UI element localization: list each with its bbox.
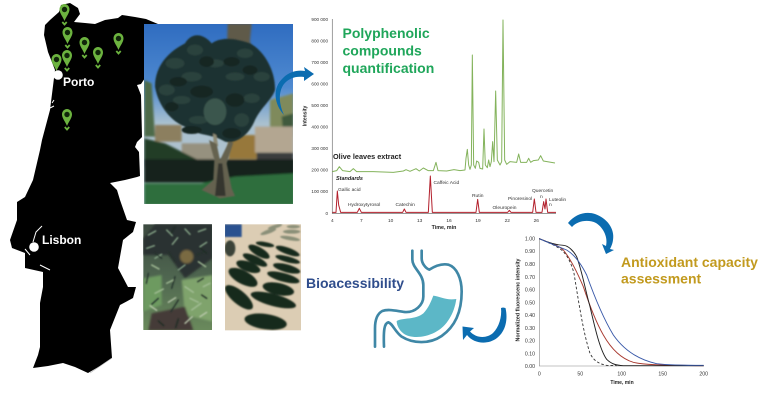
- compound labels: Hydroxytyrosol: [348, 202, 380, 208]
- x axis tick labels: 50: [577, 372, 583, 378]
- x axis tick labels: 16: [446, 218, 452, 224]
- heading: antioxidant capacity assessment: Antioxidant capacity: [621, 254, 758, 270]
- map of Portugal: [10, 3, 170, 373]
- y axis tick labels: 900 000: [311, 17, 328, 22]
- olive leaves extract trace: [332, 20, 555, 172]
- y axis tick labels: 600 000: [311, 82, 328, 86]
- y axis tick labels: 0.50: [525, 300, 535, 306]
- y axis tick labels: 100 000: [311, 189, 328, 194]
- y axis tick labels: 1.00: [525, 236, 535, 242]
- heading: polyphenolic compounds quantification: compounds: [342, 42, 422, 58]
- y axis tick labels: 300 000: [311, 146, 328, 151]
- x axis tick labels: 150: [658, 372, 667, 378]
- y axis tick labels: 0.30: [525, 326, 535, 332]
- stomach contents: [397, 296, 456, 337]
- y axis tick labels: [525, 236, 535, 370]
- Porto marker: [53, 70, 63, 80]
- x axis title: Time, min: [432, 225, 456, 231]
- compound labels: n: [549, 203, 552, 208]
- location pin: north 2: [62, 27, 72, 48]
- y axis tick labels: 400 000: [311, 124, 328, 130]
- arrow: chromatogram to antioxidant: [568, 213, 614, 254]
- photo: olive leaves on table: [221, 223, 301, 332]
- y axis tick labels: 0.90: [525, 249, 535, 255]
- x axis tick labels: 19: [475, 218, 481, 224]
- x axis title: Time, min: [610, 380, 634, 386]
- y axis tick labels: 0.10: [525, 351, 535, 357]
- compound labels: Gallic acid: [338, 187, 361, 193]
- heading: antioxidant capacity assessment: assessment: [621, 270, 702, 286]
- trace label: olive leaves extract: Olive leaves extract: [333, 152, 402, 161]
- y axis tick labels: 0.60: [525, 288, 535, 294]
- fluorescence decay chart: [516, 236, 708, 386]
- compound labels: Pinoresinol: [508, 196, 532, 202]
- location pin: north 3: [80, 37, 90, 58]
- compound labels: Quercetin: [532, 188, 553, 194]
- location pin: north 4: [93, 47, 103, 68]
- compound labels: Oleuropein: [492, 205, 517, 211]
- compound labels: n: [540, 195, 543, 200]
- y axis title: Normalized fluorescenc intensity: [516, 258, 522, 342]
- compound labels: Rutin: [472, 193, 484, 199]
- standards trace: [332, 176, 556, 212]
- stomach outline: [375, 251, 462, 347]
- arrow: tree to chromatogram: [276, 67, 314, 115]
- photo: olive branches: [143, 224, 212, 330]
- y axis tick labels: 500 000: [311, 103, 328, 108]
- decay curves: [539, 239, 704, 366]
- y axis tick labels: 200 000: [311, 168, 328, 172]
- stomach icon: [375, 251, 462, 347]
- Lisbon label: Lisbon: [42, 233, 81, 247]
- compound labels: Catechin: [396, 202, 415, 208]
- y axis tick labels: 0.70: [525, 275, 535, 281]
- x axis tick labels: 200: [699, 372, 708, 378]
- y axis tick labels: 0: [325, 211, 328, 216]
- x axis tick labels: [331, 218, 539, 224]
- chromatogram chart: [302, 17, 566, 231]
- heading: polyphenolic compounds quantification: Polyphenolic: [342, 25, 430, 41]
- compound labels: [338, 180, 566, 211]
- x axis tick labels: 13: [417, 218, 423, 224]
- Lisbon marker: [29, 242, 39, 252]
- y axis title: Intensity: [302, 106, 308, 126]
- y axis tick labels: 0.40: [525, 313, 535, 319]
- location pin: north-east: [114, 33, 124, 54]
- x axis tick labels: 4: [331, 218, 334, 224]
- x axis tick labels: [538, 372, 708, 378]
- location pin: centre: [62, 109, 72, 130]
- y axis tick labels: 700 000: [311, 60, 328, 65]
- y axis tick labels: 0.20: [525, 338, 535, 344]
- y axis tick labels: 0.00: [525, 364, 535, 370]
- x axis tick labels: 100: [617, 372, 626, 378]
- x axis tick labels: 26: [534, 218, 539, 224]
- compound labels: Luteolin: [549, 197, 566, 203]
- arrow: antioxidant to stomach: [462, 308, 506, 343]
- location pin: north 1: [60, 4, 70, 24]
- chart axes: [332, 19, 556, 214]
- heading: bioaccessibility: Bioacessibility: [306, 275, 404, 291]
- trace label: standards: Standards: [336, 176, 363, 182]
- y axis tick labels: [311, 17, 328, 216]
- photo: olive tree: [144, 23, 294, 205]
- x axis tick labels: 10: [388, 218, 394, 224]
- location pin: near Porto 2: [62, 50, 72, 70]
- y axis tick labels: 800 000: [311, 38, 328, 44]
- x axis tick labels: 22: [505, 218, 510, 224]
- compound labels: Caffeic Acid: [434, 180, 460, 186]
- chart axes: [539, 238, 704, 366]
- Porto label: Porto: [63, 75, 94, 89]
- x axis tick labels: 7: [360, 218, 363, 224]
- heading: polyphenolic compounds quantification: quantification: [342, 60, 434, 76]
- y axis tick labels: 0.80: [525, 262, 535, 268]
- x axis tick labels: 0: [538, 372, 541, 378]
- location pin: near Porto 1: [52, 54, 62, 71]
